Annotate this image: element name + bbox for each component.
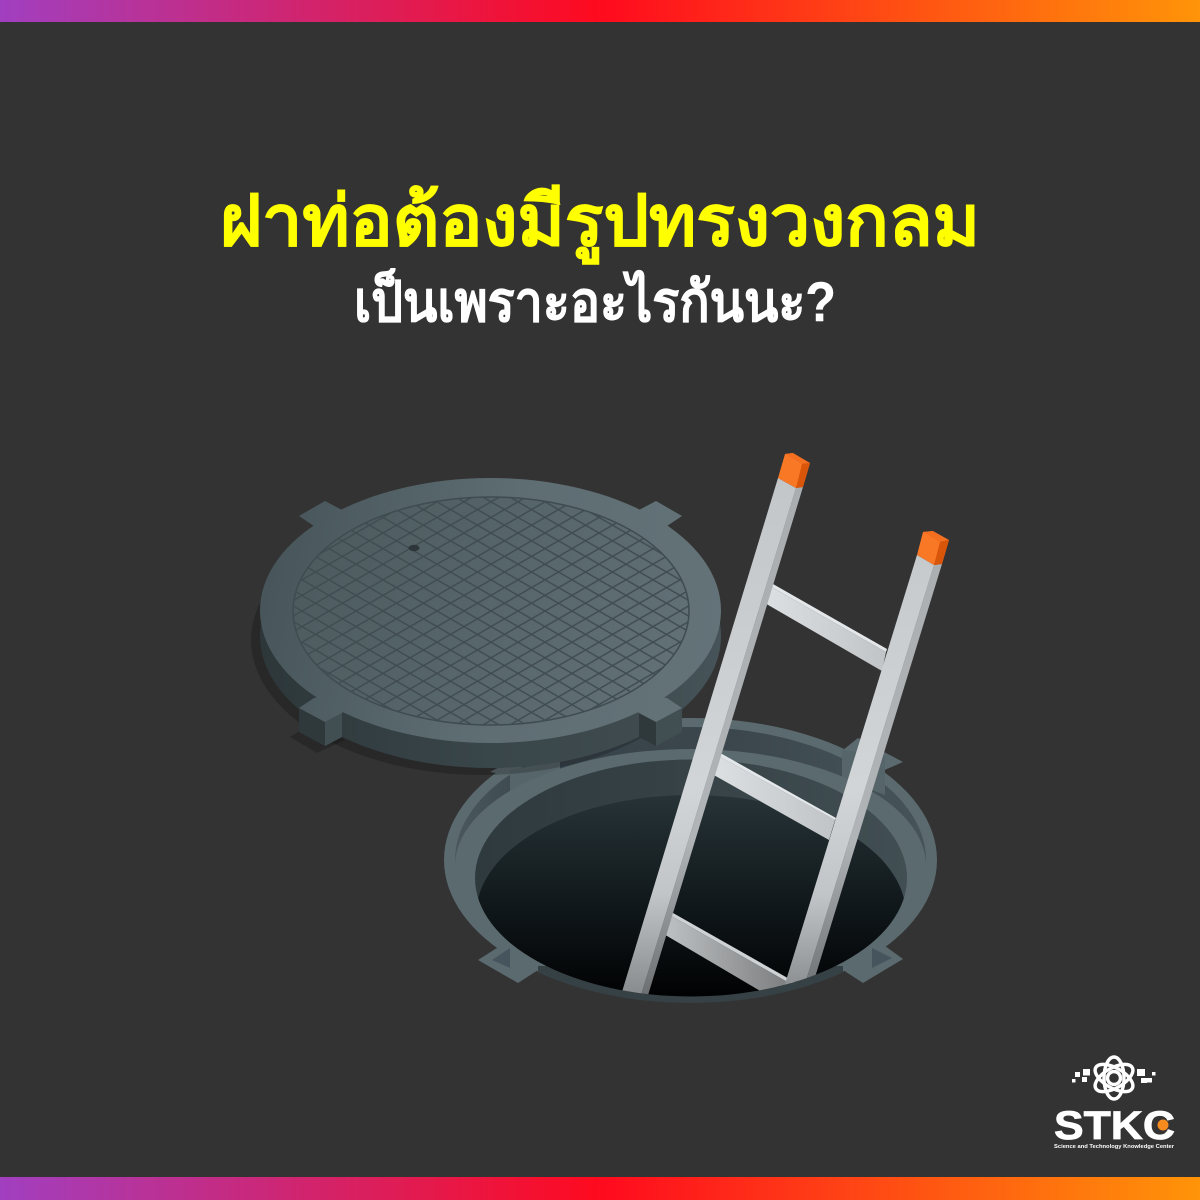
title	[220, 182, 980, 333]
right rail	[780, 531, 949, 1000]
bottom tab recesses	[492, 948, 892, 968]
icon: atom	[1091, 1057, 1137, 1099]
lid top face with tabs	[260, 478, 721, 743]
lid side wall	[260, 504, 721, 768]
lower rim shadow	[538, 966, 843, 1003]
left rail	[618, 453, 810, 1005]
tier ring	[455, 749, 926, 983]
tab floors over the channel	[510, 750, 885, 800]
recess channel	[455, 727, 926, 862]
illustration: open manhole	[444, 718, 937, 1003]
heading: white line: เป็นเพราะอะไรกันนะ?	[354, 267, 836, 333]
manhole outer rim and tabs	[444, 718, 937, 1002]
logo wordmark: STKC	[1054, 1104, 1175, 1148]
logo pixel squares	[1072, 1069, 1156, 1083]
rung 1	[763, 584, 887, 671]
shadow under the lid	[251, 505, 713, 775]
left rail orange cap	[778, 453, 810, 488]
mesh panel	[293, 497, 689, 725]
lid keyhole	[408, 545, 420, 551]
rung 2	[712, 754, 836, 840]
dark pit	[478, 795, 904, 996]
logo tagline: Science and Technology Knowledge Center	[1054, 1144, 1175, 1150]
lid tab sides	[299, 708, 682, 746]
heading: yellow line: ฝาท่อต้องมีรูปทรงวงกลม	[220, 182, 980, 265]
logo: STKC	[1054, 1057, 1175, 1150]
logo orange dot	[1158, 1120, 1168, 1130]
top gradient bar	[0, 0, 1200, 22]
manhole lid	[260, 478, 721, 768]
hole wall	[475, 760, 907, 996]
rung 3	[666, 913, 794, 990]
right rail orange cap	[917, 531, 949, 565]
ladder	[618, 453, 949, 1005]
bottom gradient bar	[0, 1177, 1200, 1200]
